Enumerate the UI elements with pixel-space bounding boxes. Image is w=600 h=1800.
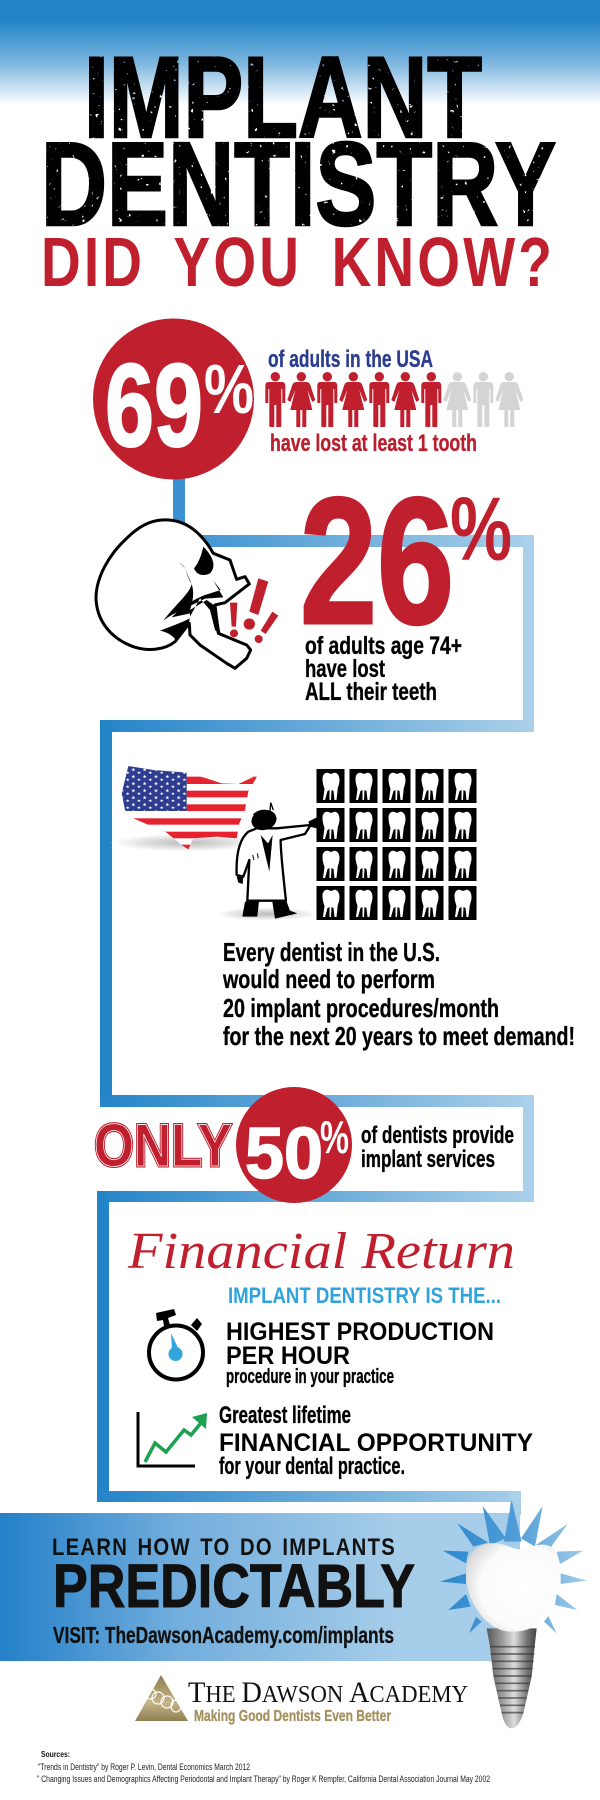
text: of dentists provide implant services: of dentists provide bbox=[361, 1122, 514, 1149]
text: every dentist statement: would need to perform bbox=[222, 964, 435, 994]
text: greatest lifetime financial opportunity: FINANCIAL OPPORTUNITY bbox=[219, 1429, 533, 1457]
text: adults age 74+: have lost bbox=[305, 655, 385, 683]
header gradient band bbox=[0, 0, 600, 105]
text: every dentist statement bbox=[222, 937, 575, 1051]
stat: 50 percent circle: % bbox=[320, 1111, 349, 1163]
icon: stopwatch bbox=[149, 1309, 203, 1380]
icon: skull with exclamation marks bbox=[96, 520, 278, 668]
text: have lost at least 1 tooth: have lost at least 1 tooth bbox=[270, 430, 477, 457]
sources bbox=[37, 1749, 490, 1784]
logo: Dawson Academy: Making Good Dentists Even Better bbox=[194, 1708, 391, 1725]
stat: 50 percent circle bbox=[236, 1087, 352, 1203]
text: every dentist statement: 20 implant procedures/month bbox=[223, 993, 499, 1023]
text: adults age 74+: of adults age 74+ bbox=[305, 632, 462, 660]
title: IMPLANT bbox=[84, 34, 482, 162]
icon: burst behind tooth bbox=[440, 1500, 587, 1633]
text: adults age 74+ bbox=[305, 632, 462, 706]
title bbox=[41, 34, 556, 251]
text: of dentists provide implant services: implant services bbox=[361, 1146, 495, 1173]
text: greatest lifetime financial opportunity: for your dental practice. bbox=[219, 1453, 405, 1480]
sources: Sources: bbox=[41, 1749, 70, 1759]
text: of dentists provide implant services bbox=[361, 1122, 514, 1173]
stat: 69 percent circle: 69 bbox=[105, 340, 203, 472]
text: greatest lifetime financial opportunity bbox=[219, 1402, 533, 1480]
text: adults age 74+: ALL their teeth bbox=[305, 678, 437, 706]
call-to-action banner bbox=[0, 1513, 520, 1661]
text: every dentist statement: Every dentist in the U.S. bbox=[223, 937, 440, 967]
icon: doctor pointing at the teeth bbox=[217, 803, 323, 921]
label: only: ONLY bbox=[94, 1112, 232, 1179]
pictogram: 7 of 10 people bbox=[265, 372, 523, 427]
text: of adults in the USA: of adults in the USA bbox=[268, 346, 433, 373]
stat: 26 percent: % bbox=[450, 480, 512, 580]
text: highest production per hour: PER HOUR bbox=[226, 1342, 350, 1370]
icon: growth chart bbox=[138, 1412, 207, 1466]
sources: "Trends in Dentistry" by Roger P. Levin, Dental Economics March 2012 bbox=[38, 1762, 250, 1772]
icon: USA flag map bbox=[112, 766, 257, 850]
logo: Dawson Academy: THE DAWSON ACADEMY bbox=[188, 1676, 468, 1709]
icon: dental implant bbox=[466, 1543, 560, 1728]
stat: 69 percent circle bbox=[93, 318, 254, 480]
text: highest production per hour bbox=[226, 1318, 494, 1388]
text: highest production per hour: procedure in your practice bbox=[226, 1366, 394, 1388]
banner heading: LEARN HOW TO DO IMPLANTS bbox=[52, 1534, 396, 1561]
stat: 26 percent: 26 bbox=[300, 461, 454, 662]
banner headline: predictably: PREDICTABLY bbox=[53, 1552, 415, 1620]
subheading: implant dentistry is the: IMPLANT DENTISTRY IS THE... bbox=[228, 1283, 501, 1308]
stat: 50 percent circle: 50 bbox=[245, 1114, 323, 1194]
text: highest production per hour: HIGHEST PRODUCTION bbox=[226, 1318, 494, 1346]
logo: Dawson Academy bbox=[135, 1675, 468, 1725]
stat: 69 percent circle: % bbox=[204, 350, 254, 428]
heading: financial return: Financial Return bbox=[127, 1223, 515, 1280]
text: greatest lifetime financial opportunity: Greatest lifetime bbox=[219, 1402, 351, 1429]
tooth x-ray grid bbox=[316, 769, 476, 920]
banner link: visit the Dawson Academy: VISIT: TheDawsonAcademy.com/implants bbox=[53, 1622, 394, 1648]
label: only: ONLY bbox=[94, 1112, 232, 1179]
connector path bbox=[97, 470, 534, 1515]
